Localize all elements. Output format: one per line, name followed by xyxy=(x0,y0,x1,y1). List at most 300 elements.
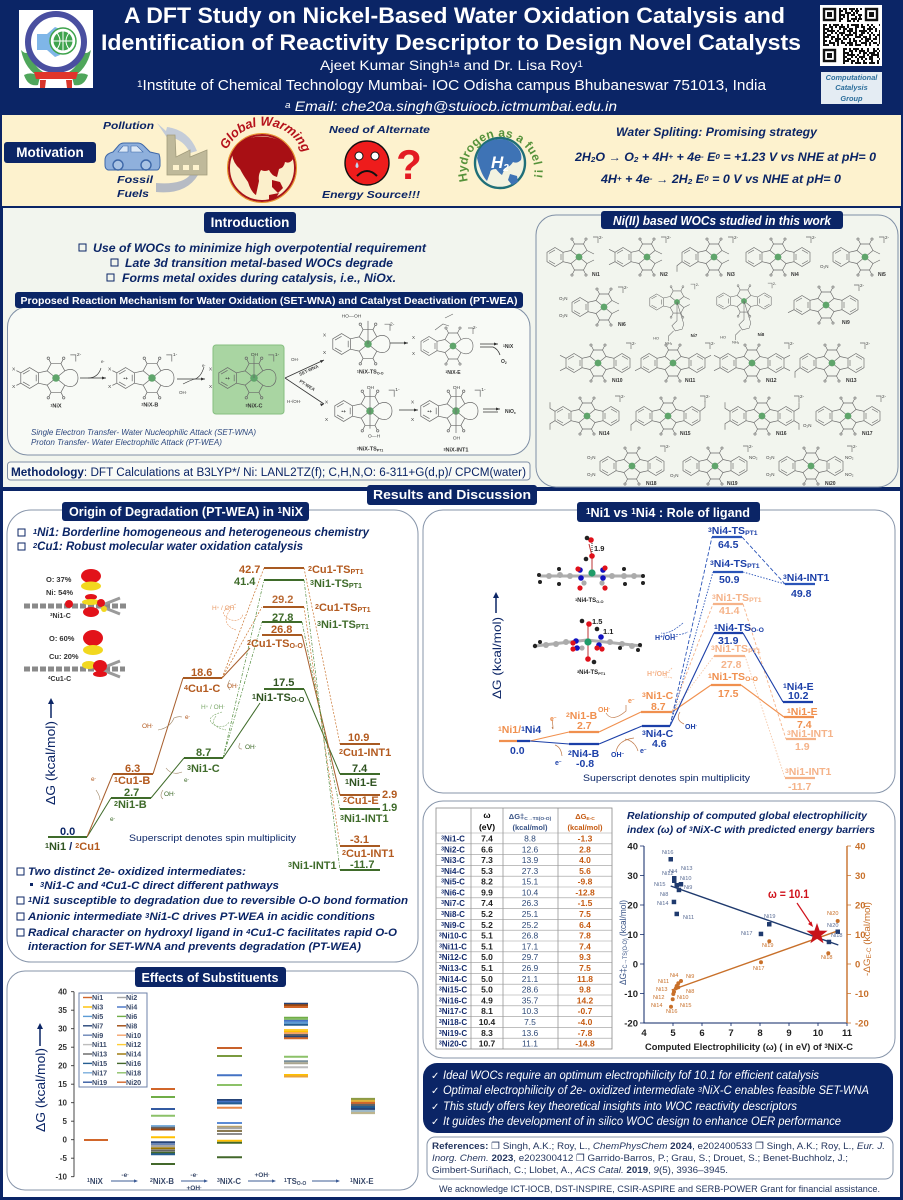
x axis labels: 9 xyxy=(786,1028,792,1039)
heading: effects of substituents: Effects of Substituents xyxy=(142,970,278,985)
table: electrophilicity values: -14.8 xyxy=(575,1039,595,1049)
table: electrophilicity values: 3Ni9-C xyxy=(441,921,465,930)
molecule: Ni1 xyxy=(547,235,604,278)
icon: factory xyxy=(167,135,207,175)
energy profile: labels: e− xyxy=(550,715,557,723)
table: electrophilicity values: -9.8 xyxy=(578,877,593,887)
legend: Ni19 xyxy=(92,1078,107,1087)
molecule: 1NiX: X xyxy=(12,366,16,372)
molecule: Ni7 xyxy=(650,283,700,346)
table: electrophilicity values: 7.5 xyxy=(579,909,591,919)
molecule: Ni5: 2- xyxy=(885,235,890,240)
table: electrophilicity values: 8.8 xyxy=(524,834,536,844)
energy profile: connectors xyxy=(87,568,340,870)
molecule: 1NiX-TS O-O xyxy=(323,314,395,376)
molecule: Ni13 xyxy=(795,341,871,384)
energy profile: labels: 18.6 xyxy=(191,667,212,679)
table: electrophilicity values: 12.6 xyxy=(522,844,539,854)
y axis with ticks: 35 xyxy=(58,1006,68,1015)
molecule: Ni11: 2- xyxy=(711,341,716,346)
molecule: Ni5 xyxy=(820,235,890,278)
heading: role of ligand xyxy=(577,502,760,522)
navy point labels: Ni11 xyxy=(683,915,694,921)
molecule: Ni4 xyxy=(746,235,817,278)
energy profile: labels: 1Ni1-E xyxy=(345,777,377,789)
introduction bullets: Use of WOCs to minimize high overpotential requirement xyxy=(93,241,427,255)
product: NiOx xyxy=(483,408,516,415)
x axis: reaction steps: 3NiX-C xyxy=(217,1177,241,1186)
right axis labels xyxy=(855,842,869,1030)
energy profile: labels: 3Ni1-C xyxy=(642,690,674,702)
table: electrophilicity values: 3Ni20-C xyxy=(439,1040,467,1049)
molecule: 2NiX-B: •+ xyxy=(123,377,128,382)
molecule: Ni15: 2- xyxy=(706,394,711,399)
arrow: oxidation 2 xyxy=(177,363,206,395)
table: electrophilicity values: 3Ni10-C xyxy=(439,932,467,941)
legend: Ni7 xyxy=(92,1021,103,1030)
molecule: Ni11: Ni11 xyxy=(685,378,696,384)
right axis labels: 30 xyxy=(855,871,866,882)
left axis labels: -20 xyxy=(624,1018,638,1030)
molecule: 3NiX-INT1: X xyxy=(411,417,415,423)
energy profile: labels: OH- xyxy=(227,683,239,690)
top bullets: 1Ni1: Borderline homogeneous and heterogeneous chemistry xyxy=(33,527,370,539)
molecule: Ni14 xyxy=(550,394,626,437)
legend: Ni11 xyxy=(92,1040,107,1049)
molecule: Ni20: O₂N xyxy=(766,472,774,477)
molecule: Ni12: Ni12 xyxy=(766,378,777,384)
molecule: Ni17: 2- xyxy=(882,394,887,399)
table: electrophilicity values: 5.1 xyxy=(481,963,493,973)
table: electrophilicity values: -4.0 xyxy=(578,1017,593,1027)
arrow xyxy=(390,342,408,344)
table: electrophilicity values: -0.7 xyxy=(578,1006,593,1016)
molecule: Ni6: 2- xyxy=(624,285,629,290)
table: electrophilicity values: 27.3 xyxy=(522,866,539,876)
molecule orbital: 3Ni1-C: O: 37% xyxy=(46,575,72,584)
panel: reaction mechanism xyxy=(8,292,530,455)
molecule: 3NiX-INT1: •+ xyxy=(427,410,432,415)
x axis: reaction steps: 1NiX xyxy=(87,1177,104,1186)
energy profile: labels: 42.7 xyxy=(239,564,260,576)
molecule: 3NiX-TS PT1: O—H xyxy=(368,433,381,439)
molecule: Ni9: Ni9 xyxy=(842,320,850,326)
panel: conclusions: It guides the development of in silico WOC design to enhance OER performance xyxy=(443,1116,841,1128)
heading: Results and Discussion xyxy=(367,485,537,505)
navy point labels: Ni12 xyxy=(662,871,674,877)
molecule: Ni20: O₂N xyxy=(766,455,774,460)
molecule orbital: 4Cu1-C xyxy=(24,630,125,683)
y axis with ticks: 15 xyxy=(58,1080,68,1089)
energy profile: labels: -3.1 xyxy=(350,834,369,846)
molecule: 3NiX-INT1: 1- xyxy=(481,387,486,393)
energy profile: labels: e− xyxy=(640,747,647,755)
orange point labels: Ni12 xyxy=(653,995,665,1001)
introduction bullets: Late 3d transition metal-based WOCs degrade xyxy=(125,256,393,270)
legend: Ni9 xyxy=(92,1031,103,1040)
table: electrophilicity values: ΔG‡C→TS(O-O) xyxy=(509,812,552,822)
molecule: Ni7: 2- xyxy=(696,283,700,287)
icon: car xyxy=(105,143,160,170)
energy profile: labels: 2Cu1-TSO-O xyxy=(247,638,303,650)
molecule: Ni16: 2- xyxy=(800,394,805,399)
x axis labels: 5 xyxy=(670,1028,676,1039)
y axis with ticks: -10 xyxy=(55,1172,68,1182)
table: electrophilicity values: 10.7 xyxy=(479,1039,496,1049)
y axis with ticks xyxy=(55,988,74,1182)
energy profile: labels: 1Ni1-TSO-O xyxy=(708,671,759,683)
energy profile: labels: 41.4 xyxy=(234,576,256,588)
fossil fuels label: Fuels xyxy=(117,188,149,200)
legend: Ni17 xyxy=(92,1068,107,1077)
molecule: Ni10: 2- xyxy=(632,341,637,346)
axis label: delta G xyxy=(490,592,504,699)
navy point labels: Ni13 xyxy=(681,866,693,872)
table: electrophilicity values: 10.4 xyxy=(522,887,539,897)
legend xyxy=(79,993,147,1087)
references: Inorg. Chem. 2023, e202300412 ❐ Garrido-Barros, P.; Grau, S.; Drouet, S.; Benet-Buchholz, J.; xyxy=(432,1153,848,1164)
energy profile: labels: 0.0 xyxy=(60,826,75,838)
molecule: Ni2: Ni2 xyxy=(660,272,668,278)
molecule: 3NiX-C: OH xyxy=(251,352,259,358)
molecule: Ni12: 2- xyxy=(790,341,795,346)
table: electrophilicity values: 5.6 xyxy=(579,866,591,876)
legend: Ni8 xyxy=(126,1021,137,1030)
energy profile: labels: 29.2 xyxy=(272,594,293,606)
table: electrophilicity values: 3Ni4-C xyxy=(441,867,465,876)
energy profile: labels: 31.9 xyxy=(718,635,739,647)
legend: Ni20 xyxy=(126,1078,141,1087)
level plot: 3NiX-C xyxy=(217,1048,242,1157)
energy profile: labels: 3Ni1-INT1 xyxy=(787,728,834,740)
table: electrophilicity values: 3Ni14-C xyxy=(439,975,467,984)
energy profile: labels: e- xyxy=(185,714,191,721)
energy profile: labels: 2Ni1-B xyxy=(566,710,598,722)
energy profile: labels: 0.0 xyxy=(510,745,525,757)
table: electrophilicity values: 17.1 xyxy=(522,941,539,951)
trend lines xyxy=(671,886,838,990)
icon: question mark: ? xyxy=(396,141,422,188)
navy data points xyxy=(668,857,840,944)
table: electrophilicity values: 4.0 xyxy=(579,855,591,865)
chart title xyxy=(627,811,876,836)
group label: Computational Catalysis Group: Computational xyxy=(826,73,878,82)
molecule orbital: 3Ni1-C: 3Ni1-C xyxy=(50,612,71,620)
x axis labels: 7 xyxy=(728,1028,734,1039)
right axis labels: 10 xyxy=(855,930,866,941)
energy profile: labels: 3Ni1-INT1 xyxy=(288,860,337,872)
molecule: Ni19: Ni19 xyxy=(727,481,738,487)
x axis: reaction steps: -e- xyxy=(190,1172,198,1179)
panel: conclusions: Ideal WOCs require an optimum electrophilicity fof 10.1 for efficient catalysis xyxy=(443,1070,819,1082)
icon: hydrogen globe xyxy=(458,130,543,190)
molecule: Ni7: NH₂ xyxy=(665,341,673,345)
orange point labels: Ni9 xyxy=(686,974,694,980)
legend: Ni6 xyxy=(126,1012,137,1021)
molecule: Ni8: NH₂ xyxy=(732,340,740,344)
icon: grey cycle arrows xyxy=(156,123,198,192)
energy profile: labels: 3Ni4-C xyxy=(642,728,674,740)
navy point labels: Ni17 xyxy=(741,931,753,937)
acknowledgement: We acknowledge ICT-IOCB, DST-INSPIRE, CSIR-ASPIRE and SERB-POWER Grant for financial assistance. xyxy=(439,1184,880,1195)
x axis labels: 10 xyxy=(813,1028,823,1039)
table: electrophilicity values: 3Ni2-C xyxy=(441,845,465,854)
orange point labels: Ni20 xyxy=(827,911,839,917)
molecule orbital: 4Cu1-C: Cu: 20% xyxy=(49,652,79,661)
energy profile: labels: e− xyxy=(628,697,635,705)
legend: Ni13 xyxy=(92,1050,107,1059)
table: electrophilicity values: 3Ni19-C xyxy=(439,1029,467,1038)
pollution label: Pollution xyxy=(103,120,154,132)
energy profile: labels: OH- xyxy=(598,706,610,714)
icon: global warming globe xyxy=(221,116,310,203)
energy profile: labels: 2.7 xyxy=(577,720,592,732)
products: 1NiX and O2: 1NiX xyxy=(503,344,514,350)
callout: omega equals 10.1 xyxy=(768,889,828,943)
energy profile: labels: 2Cu1-TSPT1 xyxy=(315,602,371,614)
molecule: Ni14: Ni14 xyxy=(599,431,610,437)
chart title: index (ω) of 3NiX-C with predicted energy barriers xyxy=(627,825,876,836)
table: electrophilicity values: (kcal/mol) xyxy=(512,823,548,832)
x axis: reaction steps: 1TSO-O xyxy=(284,1177,306,1187)
navy point labels: Ni15 xyxy=(654,882,666,888)
heading: Motivation xyxy=(4,142,96,163)
orange point labels: Ni17 xyxy=(753,966,765,972)
axis label: delta G xyxy=(34,1023,48,1132)
energy profile: labels: OH- xyxy=(685,723,698,731)
legend: Ni4 xyxy=(126,1002,137,1012)
orange point labels: Ni13 xyxy=(656,987,668,993)
molecule: 3NiX-INT1: OH xyxy=(453,385,461,391)
energy profile: levels xyxy=(499,537,816,778)
molecule: Ni3 xyxy=(677,235,739,278)
molecule: Ni1: 2- xyxy=(599,235,604,240)
email: a Email: che20a.singh@stuiocb.ictmumbai.edu.in xyxy=(285,98,617,114)
molecule 3D: 1Ni4-TS O-O: 1.9 xyxy=(594,544,604,553)
energy profile: labels: e- xyxy=(110,816,116,823)
mechanism abbreviations: Proton Transfer- Water Electrophilic Attack (PT-WEA) xyxy=(31,438,222,447)
arrows: SET-WNA and PT-WEA branches: PT-WEA xyxy=(298,379,317,393)
energy profile: labels: 7.4 xyxy=(352,763,368,775)
molecule 3D: 3Ni4-TS PT1: 1.1 xyxy=(603,627,613,636)
molecule: 1NiX: X xyxy=(12,384,16,390)
table: electrophilicity values: 8.1 xyxy=(481,1006,493,1016)
arrows: SET-WNA and PT-WEA branches: SET-WNA xyxy=(298,363,320,377)
molecule: 1NiX-E: X xyxy=(412,351,415,356)
energy profile: labels: 8.7 xyxy=(651,701,666,713)
molecule: 3NiX-C: 1- xyxy=(275,352,280,358)
energy profile: labels: 3Ni1-TSPT1 xyxy=(310,578,362,590)
panel: conclusions: ✓ xyxy=(431,1086,439,1097)
molecule: Ni8: 2- xyxy=(773,282,777,286)
table: electrophilicity values: 3Ni18-C xyxy=(439,1018,467,1027)
molecule: 1NiX-TS O-O: HO—OH xyxy=(342,314,362,320)
references xyxy=(427,1137,893,1179)
energy profile: labels: 2.9 xyxy=(382,789,397,801)
energy profile: labels: 2Ni4-B xyxy=(568,748,600,760)
header banner xyxy=(19,3,882,114)
energy profile: labels: 3Ni1-TSPT1 xyxy=(712,592,762,604)
y axis with ticks: 20 xyxy=(58,1062,68,1070)
molecule: 3NiX-TS PT1 xyxy=(325,385,400,453)
molecule: Ni16 xyxy=(725,394,805,437)
table: electrophilicity values: 26.3 xyxy=(522,898,539,908)
energy profile: labels: 8.7 xyxy=(196,747,211,759)
references: References: ❐ Singh, A.K.; Roy, L., ChemPhysChem 2024, e202400533 ❐ Singh, A.K.; Roy, L., Eur. J. xyxy=(432,1141,885,1152)
molecule: Ni3: 2- xyxy=(734,235,739,240)
left axis labels: 40 xyxy=(627,842,638,852)
table: electrophilicity values: 35.7 xyxy=(522,995,539,1005)
molecule: Ni6: Ni6 xyxy=(618,322,626,328)
icon: sad face xyxy=(345,141,389,185)
energy profile: labels: 4.6 xyxy=(652,738,667,750)
energy profile: labels: -11.7 xyxy=(350,859,374,871)
molecule orbital: 4Cu1-C: O: 60% xyxy=(49,634,75,643)
molecule: 3NiX-TS PT1: X xyxy=(325,417,329,423)
molecule: 1NiX: 1NiX xyxy=(50,403,62,410)
molecule: Ni13: 2- xyxy=(866,341,871,346)
heading: origin of degradation: Origin of Degradation (PT-WEA) in 1NiX xyxy=(69,505,304,519)
molecule: Ni20 xyxy=(766,444,858,487)
left axis labels: 10 xyxy=(627,930,638,941)
y axis with ticks: -5 xyxy=(60,1154,68,1163)
table: electrophilicity values: 5.2 xyxy=(481,909,493,919)
fossil fuels label: Fossil xyxy=(117,174,154,186)
molecule: 1NiX-E: X xyxy=(412,335,415,340)
legend: Ni2 xyxy=(126,993,137,1002)
molecule: 1NiX-E xyxy=(412,314,478,376)
table: electrophilicity values: 11.8 xyxy=(577,974,593,984)
molecule: Ni9: 2- xyxy=(860,283,865,288)
energy profile: labels: 1.9 xyxy=(795,741,810,753)
products: 1NiX and O2: O2 xyxy=(501,359,507,365)
molecule: 3NiX-TS PT1: 1- xyxy=(395,387,400,393)
methodology: Methodology: DFT Calculations at B3LYP*/ Ni: LANL2TZ(f); C,H,N,O: 6-311+G(d,p)/ CPCM(water) xyxy=(11,467,526,479)
panel: conclusions: ✓ xyxy=(431,1117,439,1128)
molecule: Ni4: 2- xyxy=(812,235,817,240)
arrows: SET-WNA and PT-WEA branches xyxy=(285,357,324,406)
molecule: Ni6: O₂N xyxy=(559,296,568,301)
mechanism abbreviations xyxy=(31,428,256,447)
energy profile: labels: Superscript denotes spin multiplicity xyxy=(129,833,296,844)
energy profile: labels: 27.8 xyxy=(272,612,293,624)
energy profile: labels: 64.5 xyxy=(718,539,739,551)
molecule: 3NiX-INT1: 3NiX-INT1 xyxy=(444,447,468,454)
water splitting text xyxy=(574,127,877,186)
bottom bullets: Radical character on hydroxyl ligand in 4Cu1-C facilitates rapid O-O xyxy=(28,927,397,939)
table: electrophilicity values: -1.5 xyxy=(578,898,593,908)
x axis labels: 8 xyxy=(757,1028,763,1039)
level plot: 2NiX-B xyxy=(151,1089,175,1164)
table: electrophilicity values: 7.4 xyxy=(481,898,493,908)
molecule: Ni5: Ni5 xyxy=(878,272,886,278)
heading: Motivation: Motivation xyxy=(16,145,84,160)
table: electrophilicity values: 4.9 xyxy=(481,995,493,1005)
molecule: Ni17: O₂N xyxy=(803,423,812,428)
y axis with ticks: 40 xyxy=(58,988,68,996)
navy point labels: Ni14 xyxy=(657,901,669,907)
table: electrophilicity values: -12.8 xyxy=(575,887,595,897)
molecule: Ni9 xyxy=(788,283,865,326)
navy point labels: Ni19 xyxy=(764,914,776,920)
table: electrophilicity values: 2.8 xyxy=(579,844,591,854)
molecule: 3NiX-C xyxy=(209,352,280,410)
table: electrophilicity values: 3Ni13-C xyxy=(439,964,467,973)
energy profile: labels: 6.3 xyxy=(125,763,140,775)
molecule: 3NiX-TS PT1: •+ xyxy=(341,410,346,415)
molecule: Ni17: Ni17 xyxy=(862,431,873,437)
energy profile: labels: 3Ni1-C xyxy=(187,763,220,775)
table: electrophilicity values: 3Ni11-C xyxy=(439,942,467,951)
energy profile: labels: 4Cu1-C xyxy=(184,683,220,695)
molecule: Ni12 xyxy=(714,341,795,384)
table: electrophilicity values: 8.2 xyxy=(481,877,493,887)
energy profile: labels: H+/OH− xyxy=(647,670,670,678)
molecule: Ni3: Ni3 xyxy=(727,272,735,278)
table: electrophilicity values: 9.9 xyxy=(481,887,493,897)
molecule: Ni11 xyxy=(635,341,716,384)
molecule: 3NiX-C: •+ xyxy=(225,377,230,382)
energy profile: labels: 1Ni1/1Ni4 xyxy=(498,724,541,736)
panel: Ni(II) based WOCs xyxy=(536,211,898,487)
table: electrophilicity values xyxy=(436,808,612,1049)
energy profile: labels: 3Ni4-TSPT1 xyxy=(708,525,758,537)
title xyxy=(101,3,801,55)
legend: Ni5 xyxy=(92,1012,103,1021)
molecule: Ni19: NO₂ xyxy=(749,455,758,460)
axis label: delta G: ΔG (kcal/mol) xyxy=(34,1048,48,1132)
table: electrophilicity values: 3Ni6-C xyxy=(441,888,465,897)
molecule: Ni18: O₂N xyxy=(587,472,596,477)
x axis: reaction steps: 2NiX-B xyxy=(150,1177,174,1186)
mechanism abbreviations: Single Electron Transfer- Water Nucleophilic Attack (SET-WNA) xyxy=(31,428,256,437)
title: A DFT Study on Nickel-Based Water Oxidation Catalysis and xyxy=(124,3,785,28)
table: electrophilicity values: 5.0 xyxy=(481,974,493,984)
water splitting text: Water Spliting: Promising strategy xyxy=(616,127,818,139)
highlighted intermediate box xyxy=(213,345,284,414)
energy profile: labels: 3Ni1-INT1 xyxy=(340,813,389,825)
molecule: Ni2: 2- xyxy=(667,235,672,240)
energy profile: labels: 41.4 xyxy=(719,605,740,617)
panel: origin of degradation xyxy=(7,502,418,962)
arrow: oxidation 2: e- xyxy=(202,363,206,368)
level plot: 1NiX xyxy=(84,1139,108,1141)
chart title: Relationship of computed global electrophilicity xyxy=(627,811,868,822)
molecule: 2NiX-B xyxy=(108,352,178,409)
legend: Ni14 xyxy=(126,1050,141,1059)
molecule: 3NiX-C: 3NiX-C xyxy=(246,403,263,410)
molecule: Ni19: O₂N xyxy=(670,473,678,478)
right axis labels: 40 xyxy=(855,842,866,852)
energy profile: labels: H+/OH− xyxy=(655,634,678,642)
molecule orbital: 4Cu1-C: 4Cu1-C xyxy=(48,675,71,683)
bottom bullets: Two distinct 2e- oxidized intermediates: xyxy=(28,866,246,878)
table: electrophilicity values: 3Ni7-C xyxy=(441,899,465,908)
energy profile: labels: 27.8 xyxy=(721,659,742,671)
table: electrophilicity values: 15.1 xyxy=(522,877,539,887)
table: electrophilicity values: -1.3 xyxy=(578,834,593,844)
product: NiOx: NiOx xyxy=(505,409,516,415)
energy profile: connectors xyxy=(530,537,786,778)
table: electrophilicity values: 7.8 xyxy=(579,931,591,941)
right axis labels: -10 xyxy=(855,989,869,1000)
right axis title: -ΔGE-C (kcal/mol) xyxy=(862,902,873,976)
x axis: reaction steps: +OH- xyxy=(187,1185,202,1192)
table: electrophilicity values: 11.1 xyxy=(522,1039,538,1049)
x axis: reaction steps: +OH- xyxy=(255,1172,270,1179)
arrow: oxidation 1: e- xyxy=(101,359,105,364)
energy profile: labels: OH- xyxy=(164,791,176,798)
